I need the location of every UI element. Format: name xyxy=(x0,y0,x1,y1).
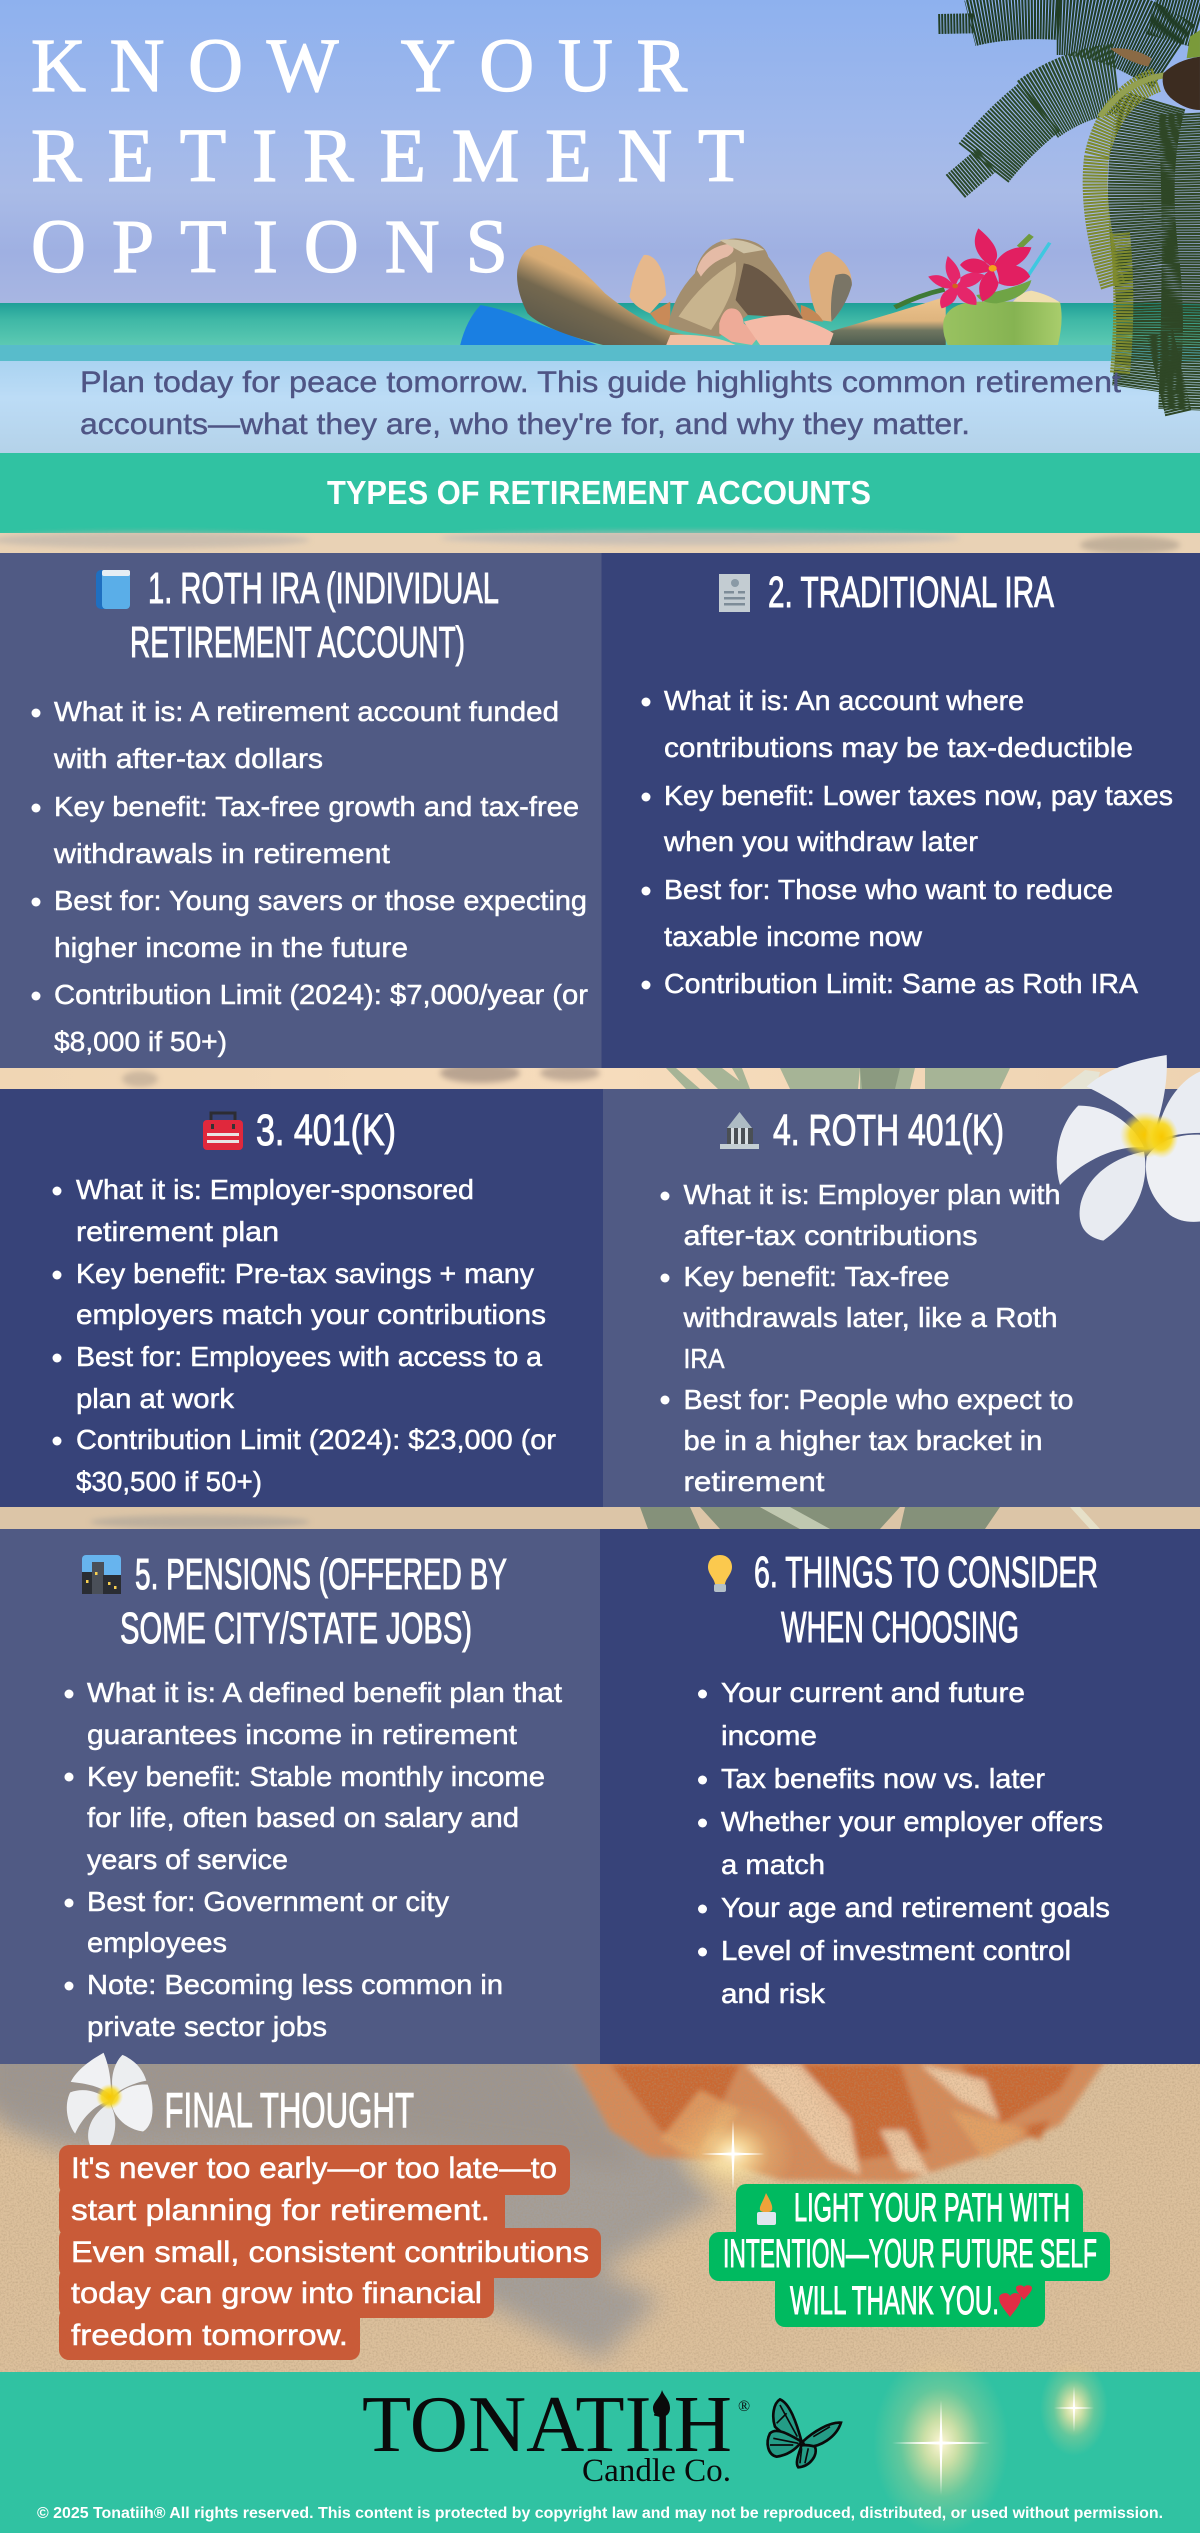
panel: Roth 401(k) xyxy=(603,1089,1200,1507)
sky xyxy=(0,0,1200,304)
intro text: Plan today for peace tomorrow. This guide highlights common retirement xyxy=(80,366,1122,399)
section banner xyxy=(0,453,1200,533)
bullet list: when you withdraw later xyxy=(663,826,978,857)
heading xyxy=(120,1550,507,1653)
bullet list: and risk xyxy=(721,1978,826,2009)
heading: FINAL THOUGHT xyxy=(164,2084,414,2138)
copyright: © 2025 Tonatiih® All rights reserved. This content is protected by copyright law and may not be reproduced, distributed, or used without permission. xyxy=(37,2505,1163,2522)
panel: pensions xyxy=(0,1529,600,2064)
palm tree xyxy=(938,7,1200,413)
bullet list: Key benefit: Stable monthly income xyxy=(87,1761,545,1792)
bullet list: after-tax contributions xyxy=(684,1220,978,1251)
bullet list: be in a higher tax bracket in xyxy=(684,1425,1042,1456)
bullet list: Your current and future xyxy=(721,1677,1025,1708)
bullet list: Contribution Limit (2024): $23,000 (or xyxy=(76,1424,556,1455)
bullet list: withdrawals in retirement xyxy=(53,838,390,869)
bullet list: Contribution Limit (2024): $7,000/year (or xyxy=(54,979,588,1010)
bullet list: $30,500 if 50+) xyxy=(76,1466,262,1497)
heading: 1. ROTH IRA (INDIVIDUAL xyxy=(148,564,499,613)
heading: 3. 401(K) xyxy=(256,1106,396,1155)
bullet list: Contribution Limit: Same as Roth IRA xyxy=(664,968,1138,999)
bullet list: Best for: Government or city xyxy=(87,1886,449,1917)
bullet list: Key benefit: Tax-free xyxy=(684,1261,950,1292)
bullet list: $8,000 if 50+) xyxy=(54,1026,227,1057)
frond: olive edge xyxy=(1095,80,1157,373)
callout: orange message: freedom tomorrow. xyxy=(71,2319,348,2352)
callout: orange message xyxy=(59,2145,601,2360)
callout: orange message: start planning for retirement. xyxy=(71,2194,490,2227)
intro text: accounts—what they are, who they're for, and why they matter. xyxy=(80,408,970,441)
intro text xyxy=(80,366,1122,441)
bullet list: taxable income now xyxy=(664,921,923,952)
panel background xyxy=(603,1089,1200,1507)
bullet list: with after-tax dollars xyxy=(53,743,323,774)
section banner: TYPES OF RETIREMENT ACCOUNTS xyxy=(327,474,871,511)
icon: hearts xyxy=(999,2285,1032,2317)
frond: right hanging xyxy=(1141,100,1190,413)
icon: large plumeria flower xyxy=(1057,1055,1200,1241)
bullet list: Level of investment control xyxy=(721,1935,1071,1966)
logo: Candle Co. xyxy=(582,2453,731,2489)
hero photo: beach scene xyxy=(0,0,1200,345)
bullet list: a match xyxy=(721,1849,825,1880)
title xyxy=(31,24,770,289)
bullet list: income xyxy=(721,1720,817,1751)
panel background xyxy=(0,1089,603,1507)
title: RETIREMENT xyxy=(31,114,770,198)
bullet list: higher income in the future xyxy=(54,932,408,963)
bullet list: What it is: Employer-sponsored xyxy=(76,1174,474,1205)
bullet list xyxy=(64,1677,562,2042)
frond: top xyxy=(938,7,1200,57)
bullet list: withdrawals later, like a Roth xyxy=(682,1302,1058,1333)
bullet list: Your age and retirement goals xyxy=(721,1892,1110,1923)
bullet list: years of service xyxy=(87,1844,288,1875)
panel: 401(k) xyxy=(0,1089,603,1507)
callout: orange message: It's never too early—or too late—to xyxy=(71,2152,557,2185)
sand strips between panels xyxy=(0,531,1200,1529)
bullet list: Note: Becoming less common in xyxy=(87,1969,503,2000)
heading: 2. TRADITIONAL IRA xyxy=(768,568,1054,617)
panel: Roth IRA xyxy=(0,553,602,1068)
panel: things to consider xyxy=(600,1529,1200,2064)
bullet list: What it is: A defined benefit plan that xyxy=(87,1677,562,1708)
bullet list: Best for: People who expect to xyxy=(684,1384,1074,1415)
bullet list: contributions may be tax-deductible xyxy=(664,732,1133,763)
icon: blue book xyxy=(96,570,130,609)
callout: orange message: today can grow into financial xyxy=(71,2277,482,2310)
bullet list: plan at work xyxy=(76,1383,235,1414)
bullet list xyxy=(32,696,588,1057)
person on blue float xyxy=(460,228,1062,345)
panel background xyxy=(0,553,602,1068)
bullet list: Whether your employer offers xyxy=(721,1806,1103,1837)
title: OPTIONS xyxy=(31,205,534,289)
logo: TONATIiH xyxy=(362,2381,732,2469)
sand background xyxy=(0,2040,1200,2372)
heading: 5. PENSIONS (OFFERED BY xyxy=(135,1550,507,1599)
callout: orange message: Even small, consistent contributions xyxy=(71,2236,589,2269)
bullet list: What it is: An account where xyxy=(664,685,1024,716)
bullet list: retirement plan xyxy=(76,1216,279,1247)
bullet list: Best for: Those who want to reduce xyxy=(664,874,1113,905)
bullet list: Key benefit: Tax-free growth and tax-free xyxy=(54,791,579,822)
callout: green message xyxy=(709,2184,1110,2327)
panel background xyxy=(600,1529,1200,2064)
icon: candle xyxy=(757,2193,776,2225)
bullet list: What it is: A retirement account funded xyxy=(54,696,559,727)
frond: middle left xyxy=(955,78,1117,187)
heading: WHEN CHOOSING xyxy=(781,1603,1019,1652)
heading: RETIREMENT ACCOUNT) xyxy=(130,618,465,667)
logo: ® xyxy=(738,2398,750,2415)
bullet list xyxy=(698,1677,1110,2009)
frond spine xyxy=(1100,75,1167,117)
icon: butterfly xyxy=(768,2399,841,2467)
callout: green message: WILL THANK YOU. xyxy=(790,2279,999,2323)
panel: Traditional IRA xyxy=(602,553,1200,1068)
section: final thought xyxy=(0,2040,1200,2372)
sparkle: large xyxy=(873,2351,1009,2533)
sea xyxy=(0,303,1200,345)
icon: receipt xyxy=(719,574,750,612)
teal band under photo xyxy=(0,345,1200,361)
bullet list: employees xyxy=(87,1927,227,1958)
palm crown xyxy=(1163,57,1200,110)
sparkle on pineapple xyxy=(671,2102,795,2206)
panel background xyxy=(602,553,1200,1068)
bullet list xyxy=(642,685,1173,999)
panel background xyxy=(0,1529,600,2064)
bullet list: Best for: Employees with access to a xyxy=(76,1341,542,1372)
bullet list: private sector jobs xyxy=(87,2011,327,2042)
bullet list: Key benefit: Lower taxes now, pay taxes xyxy=(664,780,1173,811)
heading: 4. ROTH 401(K) xyxy=(773,1106,1004,1155)
bullet list: guarantees income in retirement xyxy=(87,1719,517,1750)
heading: SOME CITY/STATE JOBS) xyxy=(120,1604,472,1653)
footer xyxy=(0,2351,1200,2533)
heading xyxy=(754,1548,1098,1652)
icon: bank xyxy=(720,1112,759,1149)
bullet list: Key benefit: Pre-tax savings + many xyxy=(76,1258,534,1289)
icon: toolbox xyxy=(203,1113,243,1150)
bullet list: Tax benefits now vs. later xyxy=(721,1763,1045,1794)
bullet list: retirement xyxy=(684,1466,825,1497)
icon: small plumeria flower xyxy=(51,2042,165,2161)
bullet list: for life, often based on salary and xyxy=(87,1802,519,1833)
bullet list xyxy=(52,1174,556,1497)
icon: light bulb xyxy=(708,1555,732,1592)
bullet list: What it is: Employer plan with xyxy=(684,1179,1060,1210)
title: KNOW YOUR xyxy=(31,24,711,108)
bullet list: Best for: Young savers or those expecting xyxy=(54,885,587,916)
intro band background xyxy=(0,361,1200,453)
heading xyxy=(130,564,499,667)
dead frond xyxy=(1110,48,1152,67)
footer background xyxy=(0,2372,1200,2533)
bullet list xyxy=(660,1179,1074,1497)
bullet list: employers match your contributions xyxy=(76,1299,546,1330)
sparkle: small xyxy=(1040,2360,1108,2456)
icon: cityscape xyxy=(82,1555,121,1594)
bullet list: IRA xyxy=(684,1343,725,1374)
